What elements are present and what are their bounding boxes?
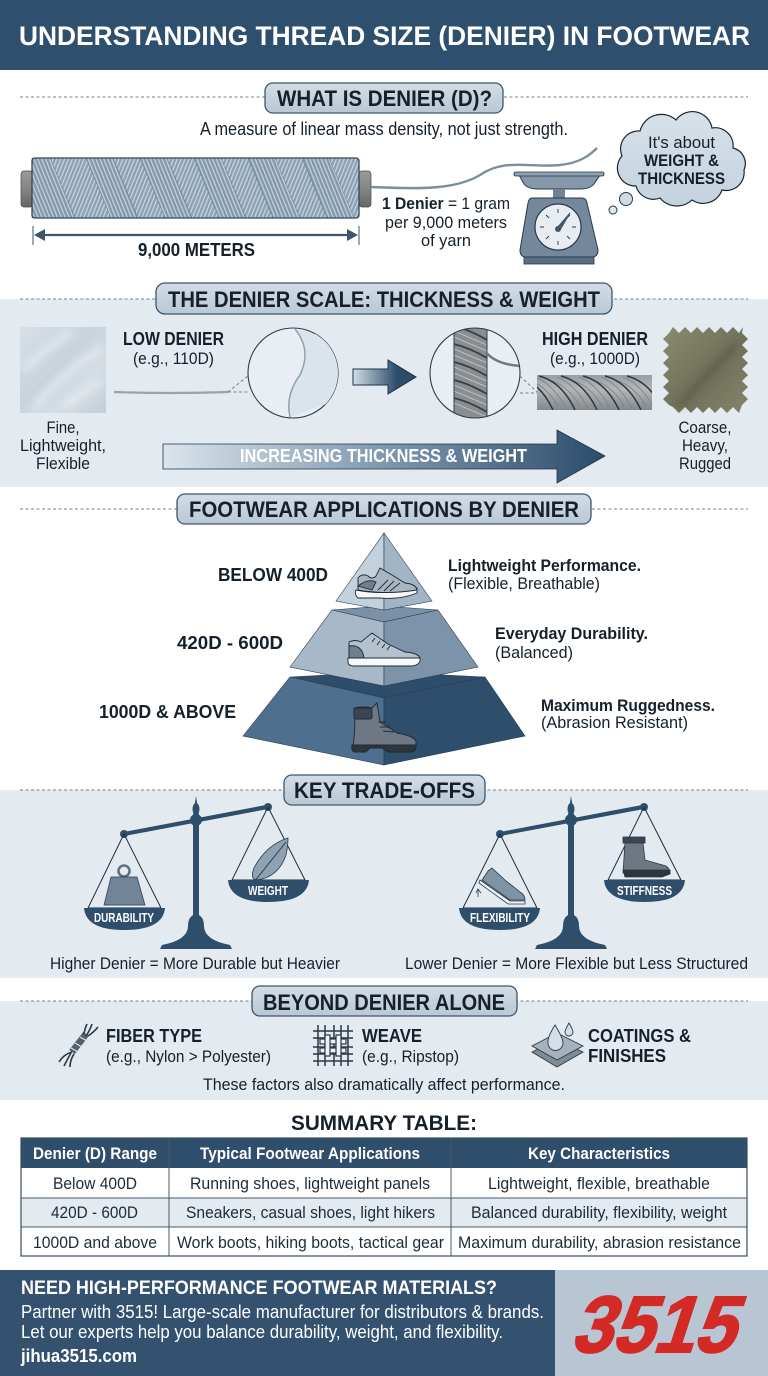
caption: coarse: Heavy, — [682, 436, 728, 455]
table header: Key Characteristics — [528, 1145, 670, 1163]
footer: call to action: NEED HIGH-PERFORMANCE FOOTWEAR MATERIALS? — [21, 1277, 497, 1299]
tier descriptions: (Abrasion Resistant) — [541, 714, 688, 732]
text: fiber type — [106, 1026, 271, 1066]
heading: what is denier: WHAT IS DENIER (D)? — [277, 86, 492, 111]
callout: thought cloud — [609, 112, 745, 214]
icon: casual sneaker — [348, 633, 420, 666]
icon: fiber — [59, 1024, 98, 1067]
caption: coarse: Coarse, — [678, 418, 732, 437]
lens: high denier magnified — [430, 326, 520, 420]
callout: thought cloud: It's about — [648, 133, 715, 152]
text: fiber type: FIBER TYPE — [106, 1026, 202, 1046]
callout: thought cloud: WEIGHT & — [644, 151, 719, 170]
denier definition: per 9,000 meters — [385, 213, 507, 232]
text: coatings: FINISHES — [588, 1046, 666, 1066]
text: fiber type: (e.g., Nylon > Polyester) — [106, 1047, 271, 1066]
panel: the denier scale — [0, 283, 768, 487]
denier definition: 1 Denier = 1 gram — [382, 194, 510, 213]
tier labels: BELOW 400D — [218, 565, 328, 585]
text: weave: (e.g., Ripstop) — [362, 1047, 459, 1066]
tier labels: 420D - 600D — [177, 633, 283, 653]
lens: low denier magnified — [248, 328, 338, 418]
text: coatings: COATINGS & — [588, 1026, 691, 1046]
caption: fine: Lightweight, — [20, 436, 106, 455]
pan: weight — [228, 880, 309, 902]
row: 1000D and above: 1000D and above — [33, 1234, 157, 1252]
caption: coarse — [678, 418, 732, 473]
row: 1000D and above: Work boots, hiking boots, tactical gear — [177, 1234, 444, 1252]
tier descriptions: Maximum Ruggedness. — [541, 697, 715, 715]
summary table — [21, 1138, 747, 1256]
text: coatings — [588, 1026, 691, 1066]
label: high denier: HIGH DENIER — [542, 329, 648, 349]
caption: coarse: Rugged — [679, 454, 731, 473]
pan: stiffness — [604, 880, 685, 902]
caption: These factors also dramatically affect performance. — [203, 1075, 565, 1094]
heading: denier scale: THE DENIER SCALE: THICKNESS & WEIGHT — [168, 287, 601, 312]
row: 420D-600D: Sneakers, casual shoes, light hikers — [186, 1204, 435, 1222]
subtitle: A measure of linear mass density, not just strength. — [200, 119, 568, 139]
caption: fine — [20, 418, 106, 473]
panel: beyond denier alone — [0, 986, 768, 1100]
denier definition: of yarn — [421, 231, 471, 250]
icon: weighing scale — [514, 172, 604, 264]
fine thread — [114, 392, 228, 393]
tier descriptions: (Balanced) — [495, 644, 573, 662]
icon: flexing shoe — [476, 868, 525, 904]
thick rope — [537, 375, 652, 410]
icon: yarn spool — [21, 158, 371, 218]
swatch: coarse fabric — [663, 327, 748, 413]
panel: footwear applications — [20, 494, 748, 765]
pan: durability: DURABILITY — [94, 910, 154, 925]
pan: flexibility: FLEXIBILITY — [470, 910, 530, 925]
balance: flexibility vs stiffness — [459, 796, 685, 949]
balance: durability vs weight — [84, 796, 309, 949]
table header: Denier (D) Range — [33, 1145, 157, 1163]
row: 420D-600D: Balanced durability, flexibility, weight — [471, 1204, 727, 1222]
tier labels — [99, 565, 328, 722]
icon: coatings — [532, 1023, 583, 1067]
footer: call to action: Partner with 3515! Large-scale manufacturer for distributors & brands. — [21, 1302, 544, 1322]
swatch: fine fabric — [20, 327, 106, 413]
row: 1000D and above — [33, 1234, 741, 1252]
tier descriptions: (Flexible, Breathable) — [448, 575, 600, 593]
label: low denier: (e.g., 110D) — [133, 349, 214, 368]
tier descriptions: Lightweight Performance. — [448, 557, 641, 575]
caption: higher denier: Higher Denier = More Durable but Heavier — [50, 954, 340, 973]
denier definition — [382, 194, 510, 250]
table header — [33, 1145, 670, 1163]
panel: key trade-offs — [0, 775, 768, 978]
row: below 400D: Running shoes, lightweight panels — [190, 1175, 430, 1193]
footer: call to action: jihua3515.com — [20, 1346, 137, 1366]
tier descriptions: Everyday Durability. — [495, 625, 648, 643]
footer: logo panel: 3515 — [564, 1281, 756, 1370]
header banner — [0, 0, 768, 70]
icon: work boot — [352, 703, 416, 752]
footer: call to action — [0, 1270, 555, 1376]
callout: thought cloud: THICKNESS — [638, 169, 725, 188]
icon: stiff boot — [623, 837, 670, 877]
pyramid chart — [243, 533, 525, 765]
table header: Typical Footwear Applications — [200, 1145, 420, 1163]
icon: running shoe — [355, 568, 417, 598]
text: weave — [362, 1026, 459, 1066]
pan: weight: WEIGHT — [248, 883, 288, 898]
pan: flexibility — [459, 908, 540, 930]
heading: key trade-offs: KEY TRADE-OFFS — [294, 778, 475, 803]
icon: weave — [313, 1025, 353, 1066]
row: 420D-600D — [51, 1204, 727, 1222]
row: 1000D and above: Maximum durability, abrasion resistance — [458, 1234, 741, 1252]
pan: durability — [84, 908, 165, 930]
length arrow — [33, 226, 359, 260]
icon: weight — [104, 866, 145, 905]
arrow: increasing thickness: INCREASING THICKNESS & WEIGHT — [240, 446, 527, 466]
heading: beyond denier: BEYOND DENIER ALONE — [263, 990, 505, 1015]
row: below 400D: Below 400D — [53, 1175, 137, 1193]
label: high denier: (e.g., 1000D) — [550, 349, 640, 368]
text: weave: WEAVE — [362, 1026, 422, 1046]
caption: fine: Flexible — [36, 454, 90, 473]
label: low denier: LOW DENIER — [123, 329, 224, 349]
tier labels: 1000D & ABOVE — [99, 702, 236, 722]
label: low denier — [123, 329, 224, 368]
row: below 400D: Lightweight, flexible, breathable — [488, 1175, 710, 1193]
arrow: increasing thickness — [163, 430, 605, 483]
row: 420D-600D: 420D - 600D — [51, 1204, 138, 1222]
yarn thread — [371, 148, 597, 188]
label: high denier — [542, 329, 648, 368]
pan: stiffness: STIFFNESS — [617, 883, 672, 898]
title: summary table: SUMMARY TABLE: — [291, 1112, 477, 1135]
icon: feather — [250, 838, 288, 887]
panel: what is denier — [20, 83, 748, 264]
arrow: magnify direction — [353, 360, 416, 394]
header banner: UNDERSTANDING THREAD SIZE (DENIER) IN FOOTWEAR — [19, 21, 750, 51]
row: below 400D — [53, 1175, 710, 1193]
tier descriptions — [448, 557, 715, 732]
length arrow: 9,000 METERS — [138, 240, 255, 260]
footer: call to action: Let our experts help you balance durability, weight, and flexibility. — [21, 1322, 503, 1342]
caption: fine: Fine, — [46, 418, 80, 437]
heading: footwear applications: FOOTWEAR APPLICATIONS BY DENIER — [189, 497, 579, 522]
